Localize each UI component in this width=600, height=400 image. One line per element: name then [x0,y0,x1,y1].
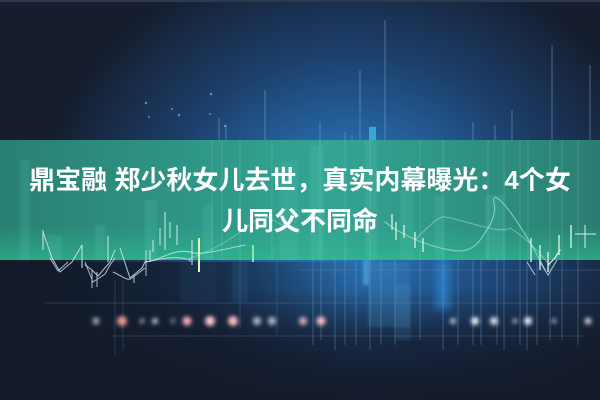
translucent towers in banner [20,140,505,260]
glowing dots row [92,316,592,326]
horizontal rules [45,270,600,336]
upper vertical light lines [219,20,590,142]
city blocks below banner [180,260,450,340]
line chart [43,197,560,278]
stars [145,93,226,148]
chart continuation below banner [50,250,557,288]
bright bar above banner [369,127,376,147]
candlesticks [43,212,596,272]
title [29,165,571,236]
banner band [0,140,600,260]
lower vertical lines [115,260,578,355]
title: 鼎宝融 郑少秋女儿去世，真实内幕曝光：4个女 [29,165,571,195]
title: 儿同父不同命 [222,206,378,236]
banner vertical lines [212,140,578,260]
